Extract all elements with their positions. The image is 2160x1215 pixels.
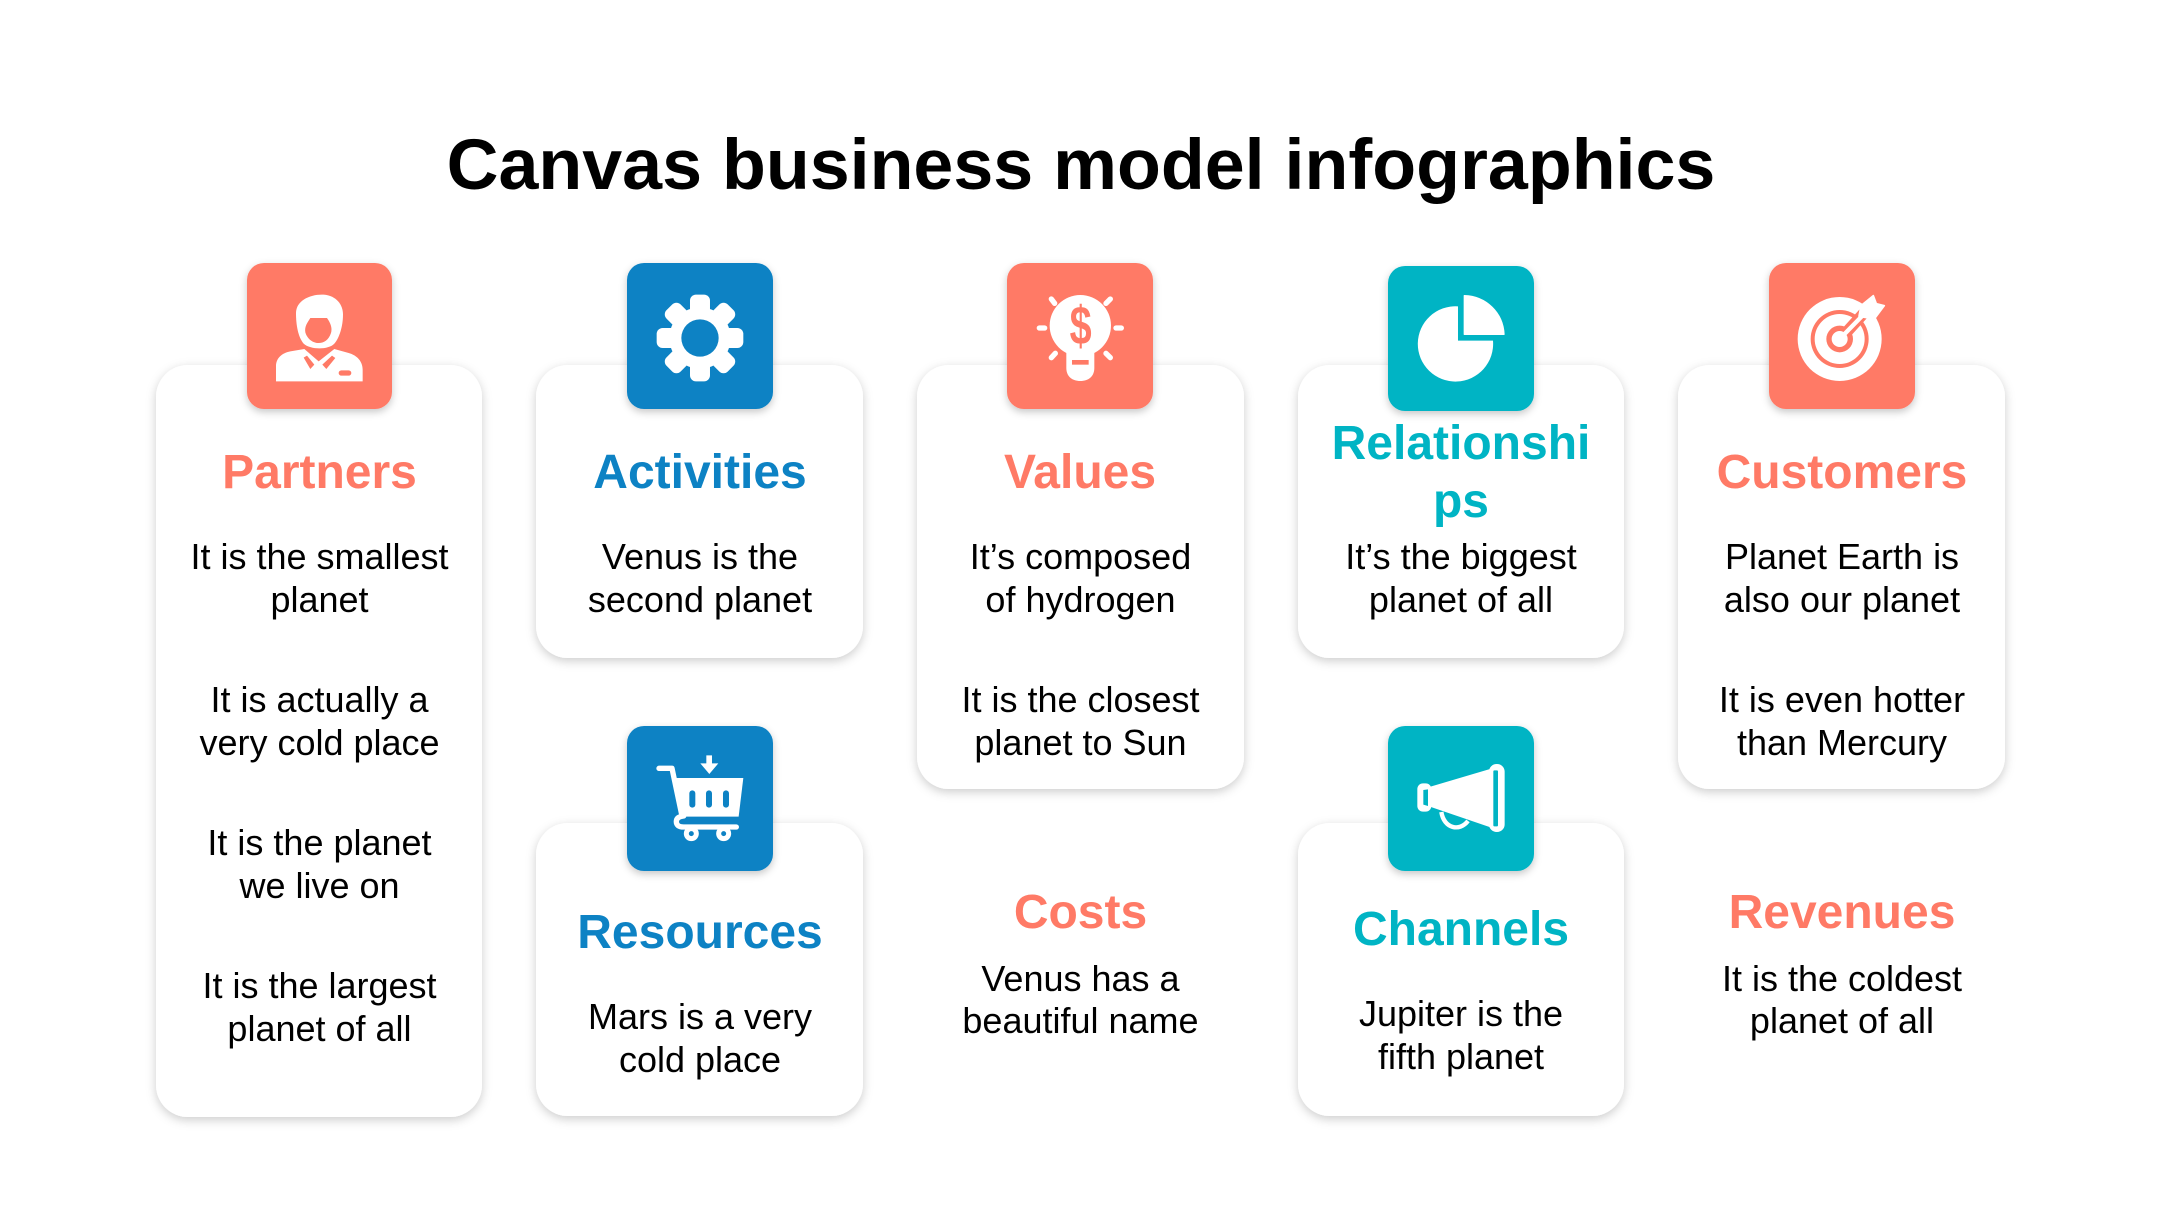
panel: Customers <box>1678 263 2005 789</box>
heading: Activities <box>593 446 807 499</box>
panel: Values <box>917 263 1244 789</box>
title: Canvas business model infographics <box>447 125 1715 205</box>
panel: Costs <box>962 886 1199 1041</box>
text block: Venus is the <box>602 536 798 577</box>
panel: Relationships <box>1298 266 1624 658</box>
text block: planet of all <box>1369 579 1553 620</box>
heading: Relationshi <box>1332 417 1590 470</box>
text block: It is the largest <box>202 965 437 1006</box>
icon: gear <box>627 263 773 409</box>
panel: Revenues <box>1722 886 1962 1041</box>
text block: It is the planet <box>207 822 432 863</box>
heading: Revenues <box>1729 886 1955 939</box>
text block: Venus has a <box>981 958 1181 999</box>
card background <box>156 365 482 1117</box>
heading: Resources <box>577 906 823 959</box>
text block: second planet <box>588 579 812 620</box>
card background <box>536 365 863 658</box>
icon: pie chart <box>1388 266 1534 411</box>
text block: of hydrogen <box>985 579 1176 620</box>
text block: very cold place <box>199 722 440 763</box>
icon: megaphone <box>1388 726 1534 871</box>
text block: cold place <box>619 1039 781 1080</box>
text block: Planet Earth is <box>1725 536 1959 577</box>
icon: person <box>247 263 392 409</box>
heading: Customers <box>1717 446 1967 499</box>
card background <box>536 823 863 1116</box>
text block: planet of all <box>1750 1000 1934 1041</box>
panel: Partners <box>156 263 482 1117</box>
text block: Jupiter is the <box>1359 993 1563 1034</box>
text block: It’s composed <box>970 536 1191 577</box>
text block: than Mercury <box>1737 722 1947 763</box>
text block: also our planet <box>1724 579 1960 620</box>
text block: It’s the biggest <box>1345 536 1577 577</box>
panel: Channels <box>1298 726 1624 1116</box>
icon: light bulb with dollar: $ <box>1070 296 1092 357</box>
text block: Mars is a very <box>588 996 812 1037</box>
heading: Values <box>1004 446 1156 499</box>
text block: It is the coldest <box>1722 958 1962 999</box>
text block: It is actually a <box>210 679 430 720</box>
text block: It is the smallest <box>190 536 449 577</box>
text block: we live on <box>238 865 400 906</box>
text block: It is the closest <box>961 679 1200 720</box>
icon: shopping cart <box>627 726 773 871</box>
card background <box>1298 823 1624 1116</box>
text block: beautiful name <box>962 1000 1199 1041</box>
icon: target with dart <box>1769 263 1915 409</box>
text block: planet to Sun <box>974 722 1187 763</box>
text block: planet <box>270 579 369 620</box>
panel: Resources <box>536 726 863 1116</box>
card background <box>917 365 1244 789</box>
icon: light bulb with dollar <box>1007 263 1153 409</box>
card background <box>1678 365 2005 789</box>
text block: planet of all <box>227 1008 412 1049</box>
heading: Partners <box>222 446 417 499</box>
heading: Costs <box>1014 886 1147 939</box>
heading: Channels <box>1353 903 1569 956</box>
text block: fifth planet <box>1378 1036 1544 1077</box>
heading: ps <box>1433 475 1489 528</box>
panel: Activities <box>536 263 863 658</box>
text block: It is even hotter <box>1719 679 1965 720</box>
card background <box>1298 365 1624 658</box>
